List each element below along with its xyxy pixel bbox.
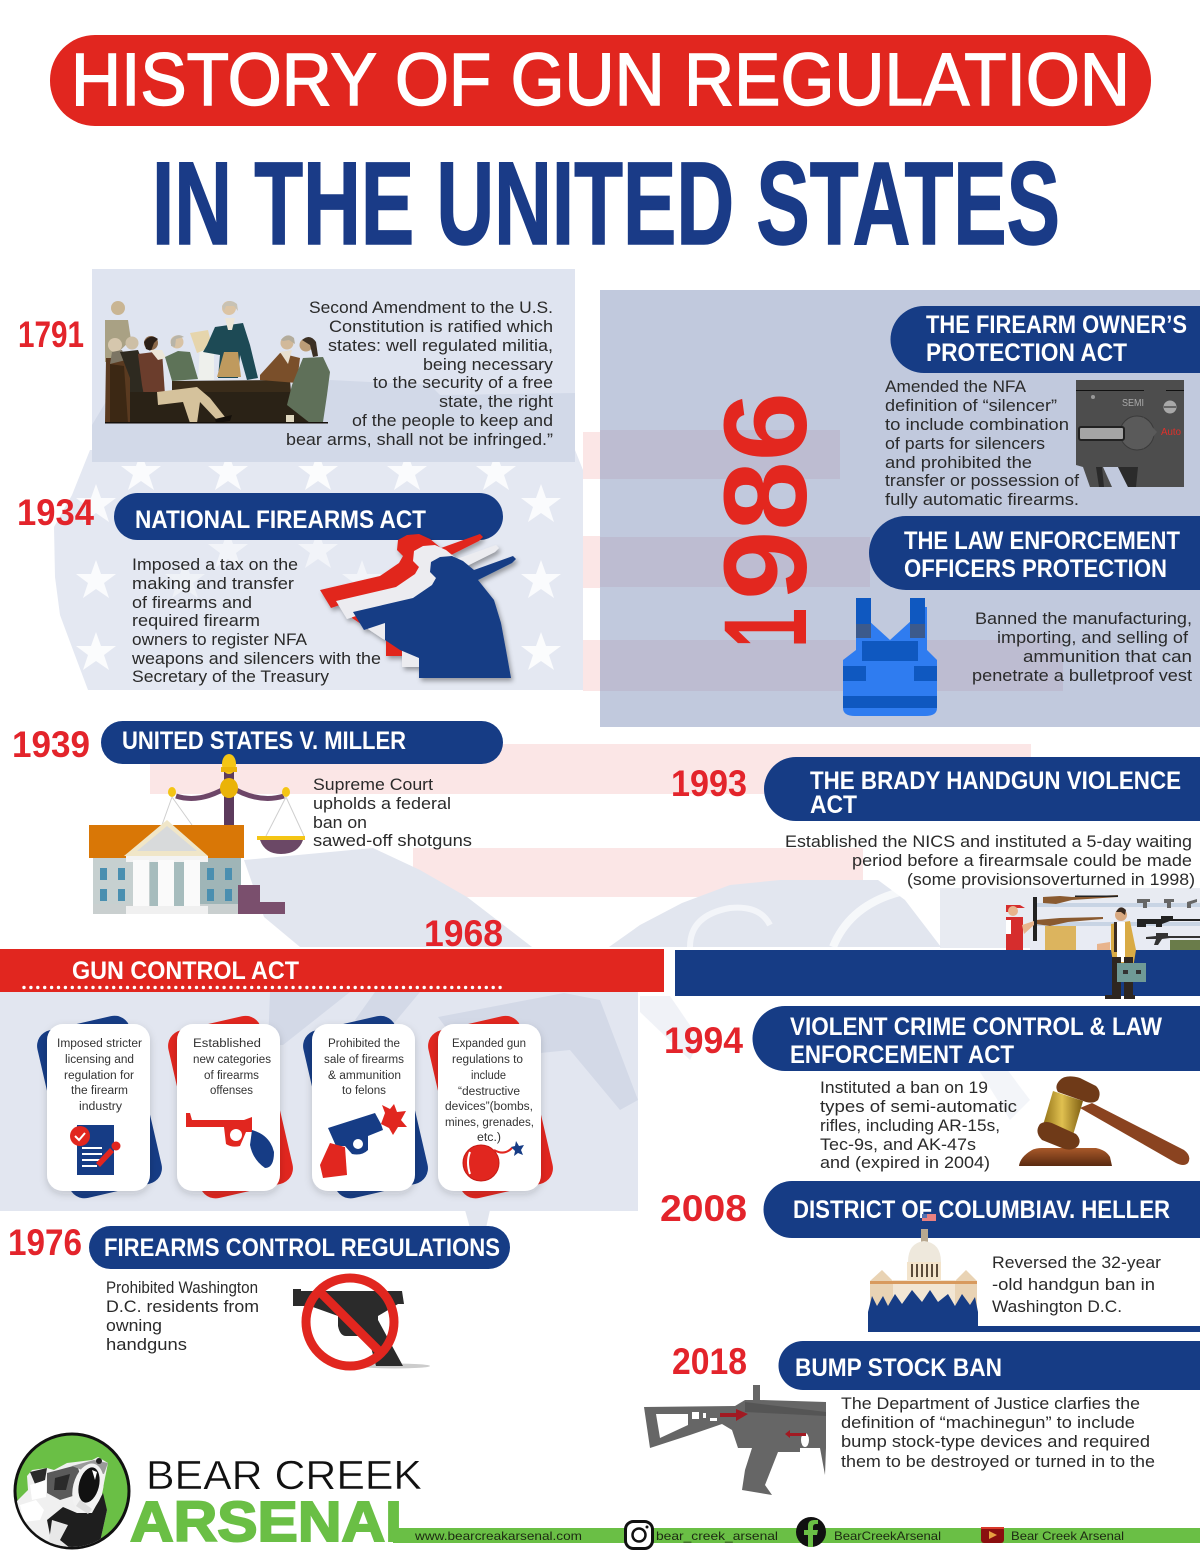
text: firearms control description: D.C. residents from — [106, 1298, 259, 1316]
heading: united states v. miller — [101, 721, 503, 764]
icon: fire selector: SEMI — [1122, 398, 1144, 409]
text: national firearms act description: making and transfer — [132, 575, 295, 593]
year 1986: 1 — [700, 608, 832, 648]
text: united states v. miller description: upholds a federal — [313, 795, 451, 813]
band: blue divider — [675, 950, 1200, 996]
card 1: licensing: Imposed stricter — [57, 1038, 142, 1050]
text: firearms control description: Prohibited Washington — [106, 1279, 258, 1297]
text: united states v. miller description — [313, 776, 472, 850]
title banner: HISTORY OF GUN REGULATION — [71, 38, 1130, 121]
footer bar: BearCreekArsenal — [834, 1529, 941, 1543]
text: law enforcement description: importing, and selling of — [997, 629, 1188, 647]
logo: bear creek arsenal — [14, 1434, 422, 1553]
heading: brady handgun violence act — [764, 757, 1200, 821]
text: second amendment: to the security of a free — [373, 374, 553, 392]
logo: bear creek arsenal: ARSENAL — [130, 1490, 422, 1553]
card 1: licensing: licensing and — [65, 1054, 134, 1066]
card 1: licensing: industry — [79, 1101, 122, 1113]
text: united states v. miller description: sawed-off shotguns — [313, 832, 472, 850]
icon: facebook — [796, 1517, 826, 1547]
card 3: felons: to felons — [342, 1085, 386, 1097]
year 2018: 2018 — [672, 1341, 747, 1382]
text: firearms control description — [106, 1279, 259, 1354]
heading: violent crime control act — [752, 1006, 1200, 1071]
card 4: destructive devices: mines, grenades, — [445, 1117, 534, 1129]
icon: instagram — [626, 1522, 652, 1548]
text: national firearms act description: required firearm — [132, 612, 260, 630]
year 1791: 1791 — [18, 314, 84, 355]
text: firearms control description: owning — [106, 1317, 162, 1335]
text: violent crime act description: Tec-9s, and AK-47s — [820, 1136, 976, 1154]
text: united states v. miller description: Supreme Court — [313, 776, 433, 794]
text: heller description: Reversed the 32-year — [992, 1254, 1162, 1272]
text: law enforcement description: Banned the manufacturing, — [975, 610, 1192, 628]
text: firearm owner's protection description: fully automatic firearms. — [885, 491, 1079, 509]
text: firearm owner's protection description — [885, 378, 1079, 509]
text: second amendment: being necessary — [423, 356, 554, 374]
text: bump stock description: bump stock-type devices and required — [841, 1433, 1150, 1451]
text: firearm owner's protection description: definition of “silencer” — [885, 397, 1057, 415]
year 1934: 1934 — [17, 492, 94, 533]
text: firearm owner's protection description: Amended the NFA — [885, 378, 1026, 396]
text: firearms control description: handguns — [106, 1336, 187, 1354]
heading: firearm owner's protection act — [890, 306, 1200, 373]
text: united states v. miller description: ban on — [313, 814, 367, 832]
heading: firearms control regulations — [89, 1226, 510, 1269]
text: bump stock description: The Department of Justice clarfies the — [841, 1395, 1140, 1413]
text: violent crime act description: Instituted a ban on 19 — [820, 1079, 988, 1097]
card 4: destructive devices: Expanded gun — [452, 1038, 526, 1050]
text: brady act description: (some provisionsoverturned in 1998) — [907, 871, 1195, 889]
text: second amendment — [286, 299, 554, 449]
text: national firearms act description: weapons and silencers with the — [131, 650, 381, 668]
text: violent crime act description: rifles, including AR-15s, — [820, 1117, 1000, 1135]
icon: youtube — [981, 1527, 1004, 1543]
card 2: new offenses: offenses — [210, 1085, 253, 1097]
text: bump stock description: them to be destroyed or turned in to the — [841, 1453, 1155, 1471]
text: law enforcement description — [972, 610, 1192, 685]
year 1993: 1993 — [671, 763, 747, 804]
panel: 1986 background — [600, 290, 1200, 727]
card 2: new offenses: of firearms — [204, 1070, 259, 1082]
heading: law enforcement officers protection — [869, 516, 1200, 590]
text: violent crime act description — [820, 1079, 1017, 1172]
heading: violent crime control act: ENFORCEMENT ACT — [790, 1041, 1014, 1069]
heading: bump stock ban — [778, 1341, 1200, 1390]
text: bump stock description: definition of “machinegun” to include — [841, 1414, 1135, 1432]
text: second amendment: states: well regulated militia, — [328, 337, 553, 355]
text: national firearms act description: owners to register NFA — [132, 631, 307, 649]
text: national firearms act description: Secretary of the Treasury — [132, 668, 330, 686]
text: brady act description: Established the NICS and instituted a 5-day waiting — [785, 833, 1192, 851]
icon: gavel — [1019, 1076, 1189, 1166]
text: heller description — [992, 1254, 1162, 1316]
icon: bump stock rifle — [644, 1385, 826, 1495]
text: brady act description — [785, 833, 1195, 889]
text: firearm owner's protection description: to include combination — [885, 416, 1069, 434]
heading: united states v. miller: UNITED STATES V. MILLER — [122, 727, 406, 755]
card 1: licensing: regulation for — [64, 1070, 134, 1082]
year 1986: 986 — [700, 392, 832, 600]
text: national firearms act description — [131, 556, 381, 686]
text: violent crime act description: types of semi-automatic — [820, 1098, 1017, 1116]
icon: bulletproof vest — [843, 598, 937, 716]
heading: firearms control regulations: FIREARMS CONTROL REGULATIONS — [104, 1234, 500, 1262]
footer bar: www.bearcreakarsenal.com — [414, 1529, 582, 1543]
illustration: signing of the constitution — [105, 301, 330, 424]
text: second amendment: bear arms, shall not be infringed.” — [286, 431, 553, 449]
text: second amendment: of the people to keep and — [352, 412, 553, 430]
card 1: licensing — [34, 1013, 165, 1201]
heading: law enforcement officers protection: OFFICERS PROTECTION — [904, 555, 1167, 583]
year 1994: 1994 — [664, 1020, 743, 1061]
panel: 1791 background — [92, 269, 575, 462]
heading: brady handgun violence act: ACT — [810, 791, 857, 819]
icon: courthouse and scales — [89, 754, 305, 914]
panel: gun control act cards — [0, 992, 638, 1211]
card 2: new offenses: new categories — [193, 1054, 271, 1066]
year 1968: 1968 — [424, 913, 503, 954]
text: firearm owner's protection description: of parts for silencers — [885, 435, 1045, 453]
card 3: felons: sale of firearms — [324, 1054, 404, 1066]
year 1939: 1939 — [12, 724, 90, 765]
card 4: destructive devices: regulations to — [452, 1054, 523, 1066]
icon: fire selector — [1076, 380, 1184, 487]
heading: violent crime control act: VIOLENT CRIME CONTROL & LAW — [790, 1013, 1162, 1041]
card 2: new offenses: Established — [193, 1038, 261, 1050]
heading: bump stock ban: BUMP STOCK BAN — [795, 1354, 1002, 1382]
text: bump stock description — [841, 1395, 1155, 1471]
illustration: gun store — [1006, 895, 1200, 999]
text: second amendment: state, the right — [439, 393, 553, 411]
footer bar — [393, 1528, 1200, 1543]
band: gun control act red header — [0, 949, 664, 992]
card 4: destructive devices — [425, 1013, 556, 1202]
year 2008: 2008 — [660, 1188, 747, 1229]
band: gun control act red header: GUN CONTROL ACT — [72, 957, 299, 985]
heading: national firearms act — [114, 493, 503, 540]
heading: national firearms act: NATIONAL FIREARMS ACT — [135, 506, 426, 534]
footer bar: Bear Creek Arsenal — [1011, 1529, 1124, 1543]
text: second amendment: Second Amendment to the U.S. — [309, 299, 553, 317]
heading: firearm owner's protection act: PROTECTION ACT — [926, 339, 1127, 367]
text: national firearms act description: of firearms and — [132, 594, 252, 612]
card 3: felons — [300, 1013, 431, 1202]
card 2: new offenses — [165, 1013, 296, 1202]
card 1: licensing: the firearm — [71, 1085, 128, 1097]
text: heller description: Washington D.C. — [992, 1298, 1122, 1316]
text: law enforcement description: ammunition that can — [1023, 648, 1192, 666]
background: flag and silhouette artwork — [54, 432, 1200, 1228]
text: firearm owner's protection description: and prohibited the — [885, 454, 1032, 472]
heading: district of columbia v. heller — [764, 1181, 1200, 1238]
card 3: felons: & ammunition — [328, 1070, 401, 1082]
icon: fire selector: Auto — [1161, 427, 1181, 438]
text: heller description: -old handgun ban in — [992, 1276, 1155, 1294]
year 1976: 1976 — [8, 1222, 82, 1263]
text: violent crime act description: and (expired in 2004) — [820, 1154, 990, 1172]
text: national firearms act description: Imposed a tax on the — [132, 556, 298, 574]
text: brady act description: period before a firearmsale could be made — [852, 852, 1192, 870]
footer bar: bear_creek_arsenal — [656, 1529, 778, 1543]
icon: capitol building with crowd — [868, 1214, 1200, 1333]
card 4: destructive devices: devices”(bombs, — [445, 1101, 533, 1113]
card 4: destructive devices: etc.) — [477, 1132, 501, 1144]
logo: bear creek arsenal: BEAR CREEK — [146, 1452, 422, 1498]
card 4: destructive devices: “destructive — [458, 1086, 520, 1098]
text: law enforcement description: penetrate a bulletproof vest — [972, 667, 1192, 685]
card 3: felons: Prohibited the — [328, 1038, 400, 1050]
icon: no handgun sign — [293, 1278, 430, 1368]
card 4: destructive devices: include — [471, 1070, 506, 1082]
icon: soldier silhouettes — [320, 534, 516, 678]
text: firearm owner's protection description: transfer or possession of — [885, 472, 1079, 490]
text: second amendment: Constitution is ratified which — [329, 318, 553, 336]
